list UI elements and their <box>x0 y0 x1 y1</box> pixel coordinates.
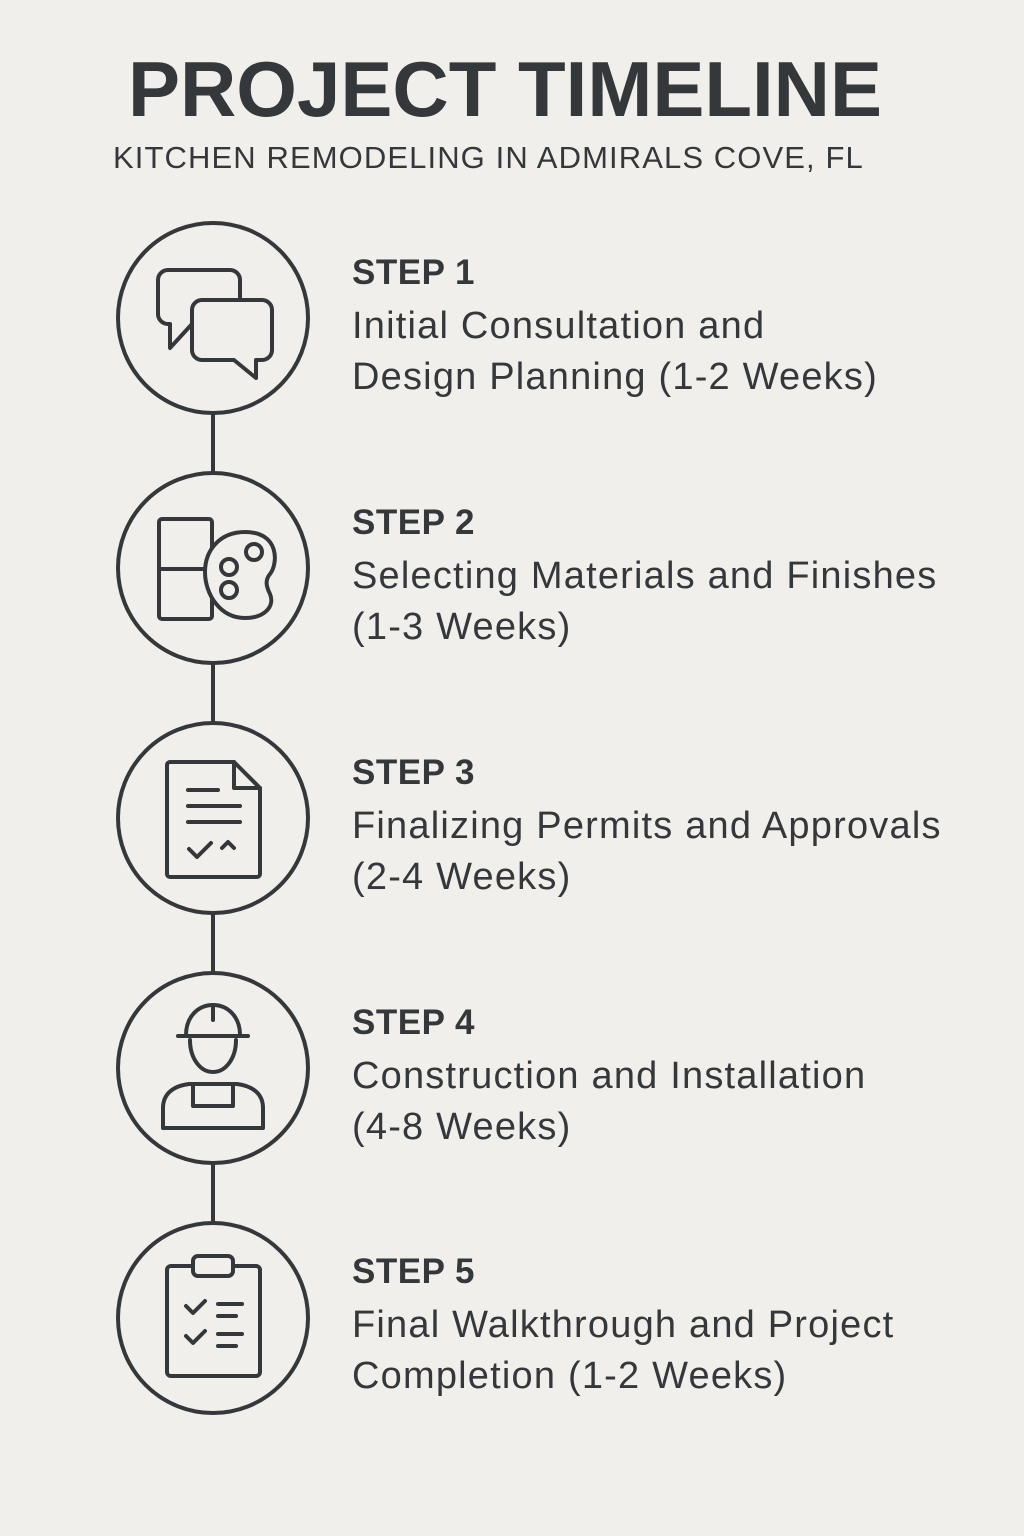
step 4 text: (4-8 Weeks) <box>352 1106 571 1148</box>
icon: checklist clipboard <box>118 1223 308 1413</box>
step 1 text: Initial Consultation and <box>352 305 765 347</box>
step 3 text: STEP 3 <box>352 753 475 792</box>
step 1 text: Design Planning (1-2 Weeks) <box>352 356 878 398</box>
icon: worker <box>118 973 308 1163</box>
step 2 text: (1-3 Weeks) <box>352 606 571 648</box>
step 5 text <box>352 1252 894 1397</box>
step 5 text: STEP 5 <box>352 1252 475 1291</box>
step 1 text: STEP 1 <box>352 253 475 292</box>
step 4 text <box>352 1003 866 1148</box>
step 2 text: STEP 2 <box>352 503 475 542</box>
step 3 text <box>352 753 942 898</box>
step 1 text <box>352 253 878 398</box>
subtitle: KITCHEN REMODELING IN ADMIRALS COVE, FL <box>113 140 864 175</box>
step 4 text: STEP 4 <box>352 1003 475 1042</box>
icon: speech bubbles <box>118 223 308 413</box>
step 3 text: Finalizing Permits and Approvals <box>352 805 942 847</box>
icon: document <box>118 723 308 913</box>
icon: swatches and palette <box>118 473 308 663</box>
step 5 text: Final Walkthrough and Project <box>352 1304 894 1346</box>
step 2 text <box>352 503 937 648</box>
connector lines <box>211 413 215 1223</box>
step 4 text: Construction and Installation <box>352 1055 866 1097</box>
step 3 text: (2-4 Weeks) <box>352 856 571 898</box>
step 2 text: Selecting Materials and Finishes <box>352 555 937 597</box>
title: PROJECT TIMELINE <box>128 45 882 133</box>
step 5 text: Completion (1-2 Weeks) <box>352 1355 787 1397</box>
